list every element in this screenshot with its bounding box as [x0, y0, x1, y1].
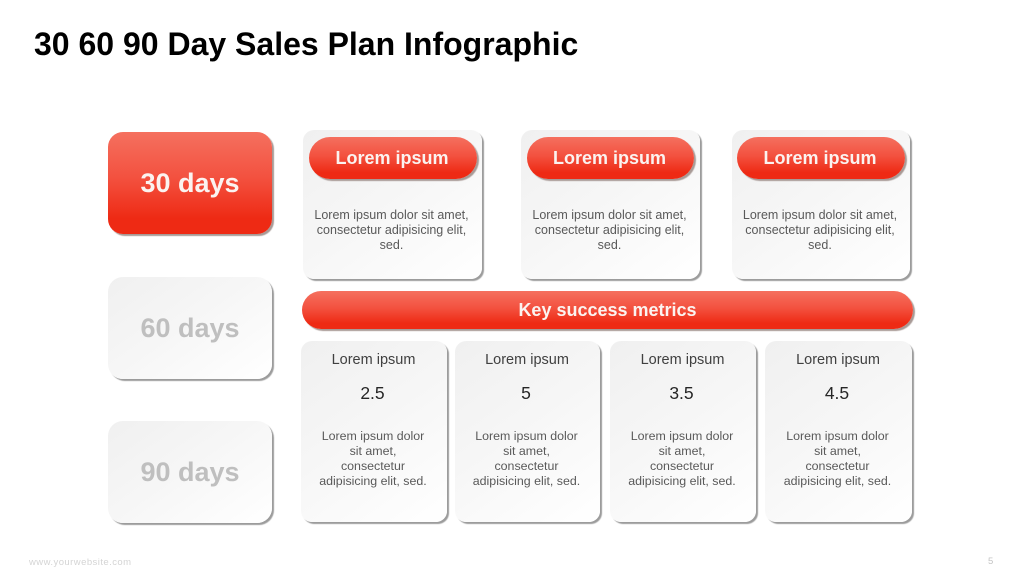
card 2 text — [532, 208, 687, 252]
card 3 text: Lorem ipsum dolor sit amet, — [743, 208, 897, 222]
panel: 30 days: 30 days — [140, 168, 240, 198]
metric 3 heading: Lorem ipsum — [641, 352, 724, 368]
panel: 30 days — [108, 132, 272, 234]
pill: top 1 — [309, 137, 477, 179]
card 2 text: Lorem ipsum dolor sit amet, — [532, 208, 687, 222]
card 1 text: consectetur adipisicing elit, — [317, 223, 466, 237]
metric 4 heading: Lorem ipsum — [796, 352, 880, 368]
metric card 2 — [455, 341, 600, 522]
pill: top 2 — [527, 137, 694, 179]
metric 1 text: Lorem ipsum dolor — [322, 428, 424, 442]
card 2 text: consectetur adipisicing elit, — [535, 223, 684, 237]
card 2 text: sed. — [598, 238, 621, 252]
metric 2 value: 5 — [521, 383, 531, 403]
panel: 60 days — [108, 277, 272, 379]
metric 2 text: adipisicing elit, sed. — [473, 474, 580, 488]
metric 1 value: 2.5 — [360, 383, 385, 403]
bar: key success metrics: Key success metrics — [518, 300, 697, 320]
metric 1 text: adipisicing elit, sed. — [319, 474, 427, 488]
metric 1 text: sit amet, — [350, 444, 396, 458]
metric card 3 — [610, 341, 756, 522]
footer website: www.yourwebsite.com — [29, 557, 132, 568]
card: top 1 — [303, 130, 482, 279]
metric 2 text: consectetur — [494, 459, 559, 473]
metric 3 text: consectetur — [650, 459, 714, 473]
card 1 text: Lorem ipsum dolor sit amet, — [314, 208, 469, 222]
metric 3 text — [628, 428, 736, 488]
metric 4 text: consectetur — [805, 459, 870, 473]
pill: top 3 — [737, 137, 905, 179]
panel: 60 days: 60 days — [140, 313, 240, 343]
metric card 1 — [301, 341, 447, 522]
pill: top 2: Lorem ipsum — [553, 148, 666, 168]
card: top 3 — [732, 130, 910, 279]
card 3 text: sed. — [808, 238, 832, 252]
panel: 90 days: 90 days — [140, 457, 240, 487]
bar: key success metrics — [302, 291, 913, 329]
metric 3 text: adipisicing elit, sed. — [628, 474, 736, 488]
metric card 4 — [765, 341, 912, 522]
title: 30 60 90 Day Sales Plan Infographic — [34, 26, 578, 62]
metric 4 text: adipisicing elit, sed. — [784, 474, 891, 488]
footer page number: 5 — [988, 556, 993, 567]
pill: top 1: Lorem ipsum — [335, 148, 449, 168]
metric 2 heading: Lorem ipsum — [485, 352, 569, 368]
metric 4 value: 4.5 — [825, 383, 849, 403]
card: top 2 — [521, 130, 700, 279]
metric 2 text — [473, 428, 580, 488]
pill: top 3: Lorem ipsum — [763, 148, 877, 168]
card 1 text: sed. — [380, 238, 403, 252]
metric 2 text: Lorem ipsum dolor — [475, 428, 578, 442]
metric 4 text: sit amet, — [814, 444, 861, 458]
panel: 90 days — [108, 421, 272, 523]
metric 4 text: Lorem ipsum dolor — [786, 428, 889, 442]
metric 1 heading: Lorem ipsum — [332, 352, 415, 368]
metric 1 text — [319, 428, 427, 488]
card 1 text — [314, 208, 469, 252]
metric 3 value: 3.5 — [669, 383, 694, 403]
card 3 text — [743, 208, 897, 252]
card 3 text: consectetur adipisicing elit, — [745, 223, 895, 237]
metric 3 text: sit amet, — [659, 444, 705, 458]
metric 2 text: sit amet, — [503, 444, 550, 458]
metric 3 text: Lorem ipsum dolor — [631, 428, 733, 442]
metric 4 text — [784, 428, 891, 488]
metric 1 text: consectetur — [341, 459, 405, 473]
